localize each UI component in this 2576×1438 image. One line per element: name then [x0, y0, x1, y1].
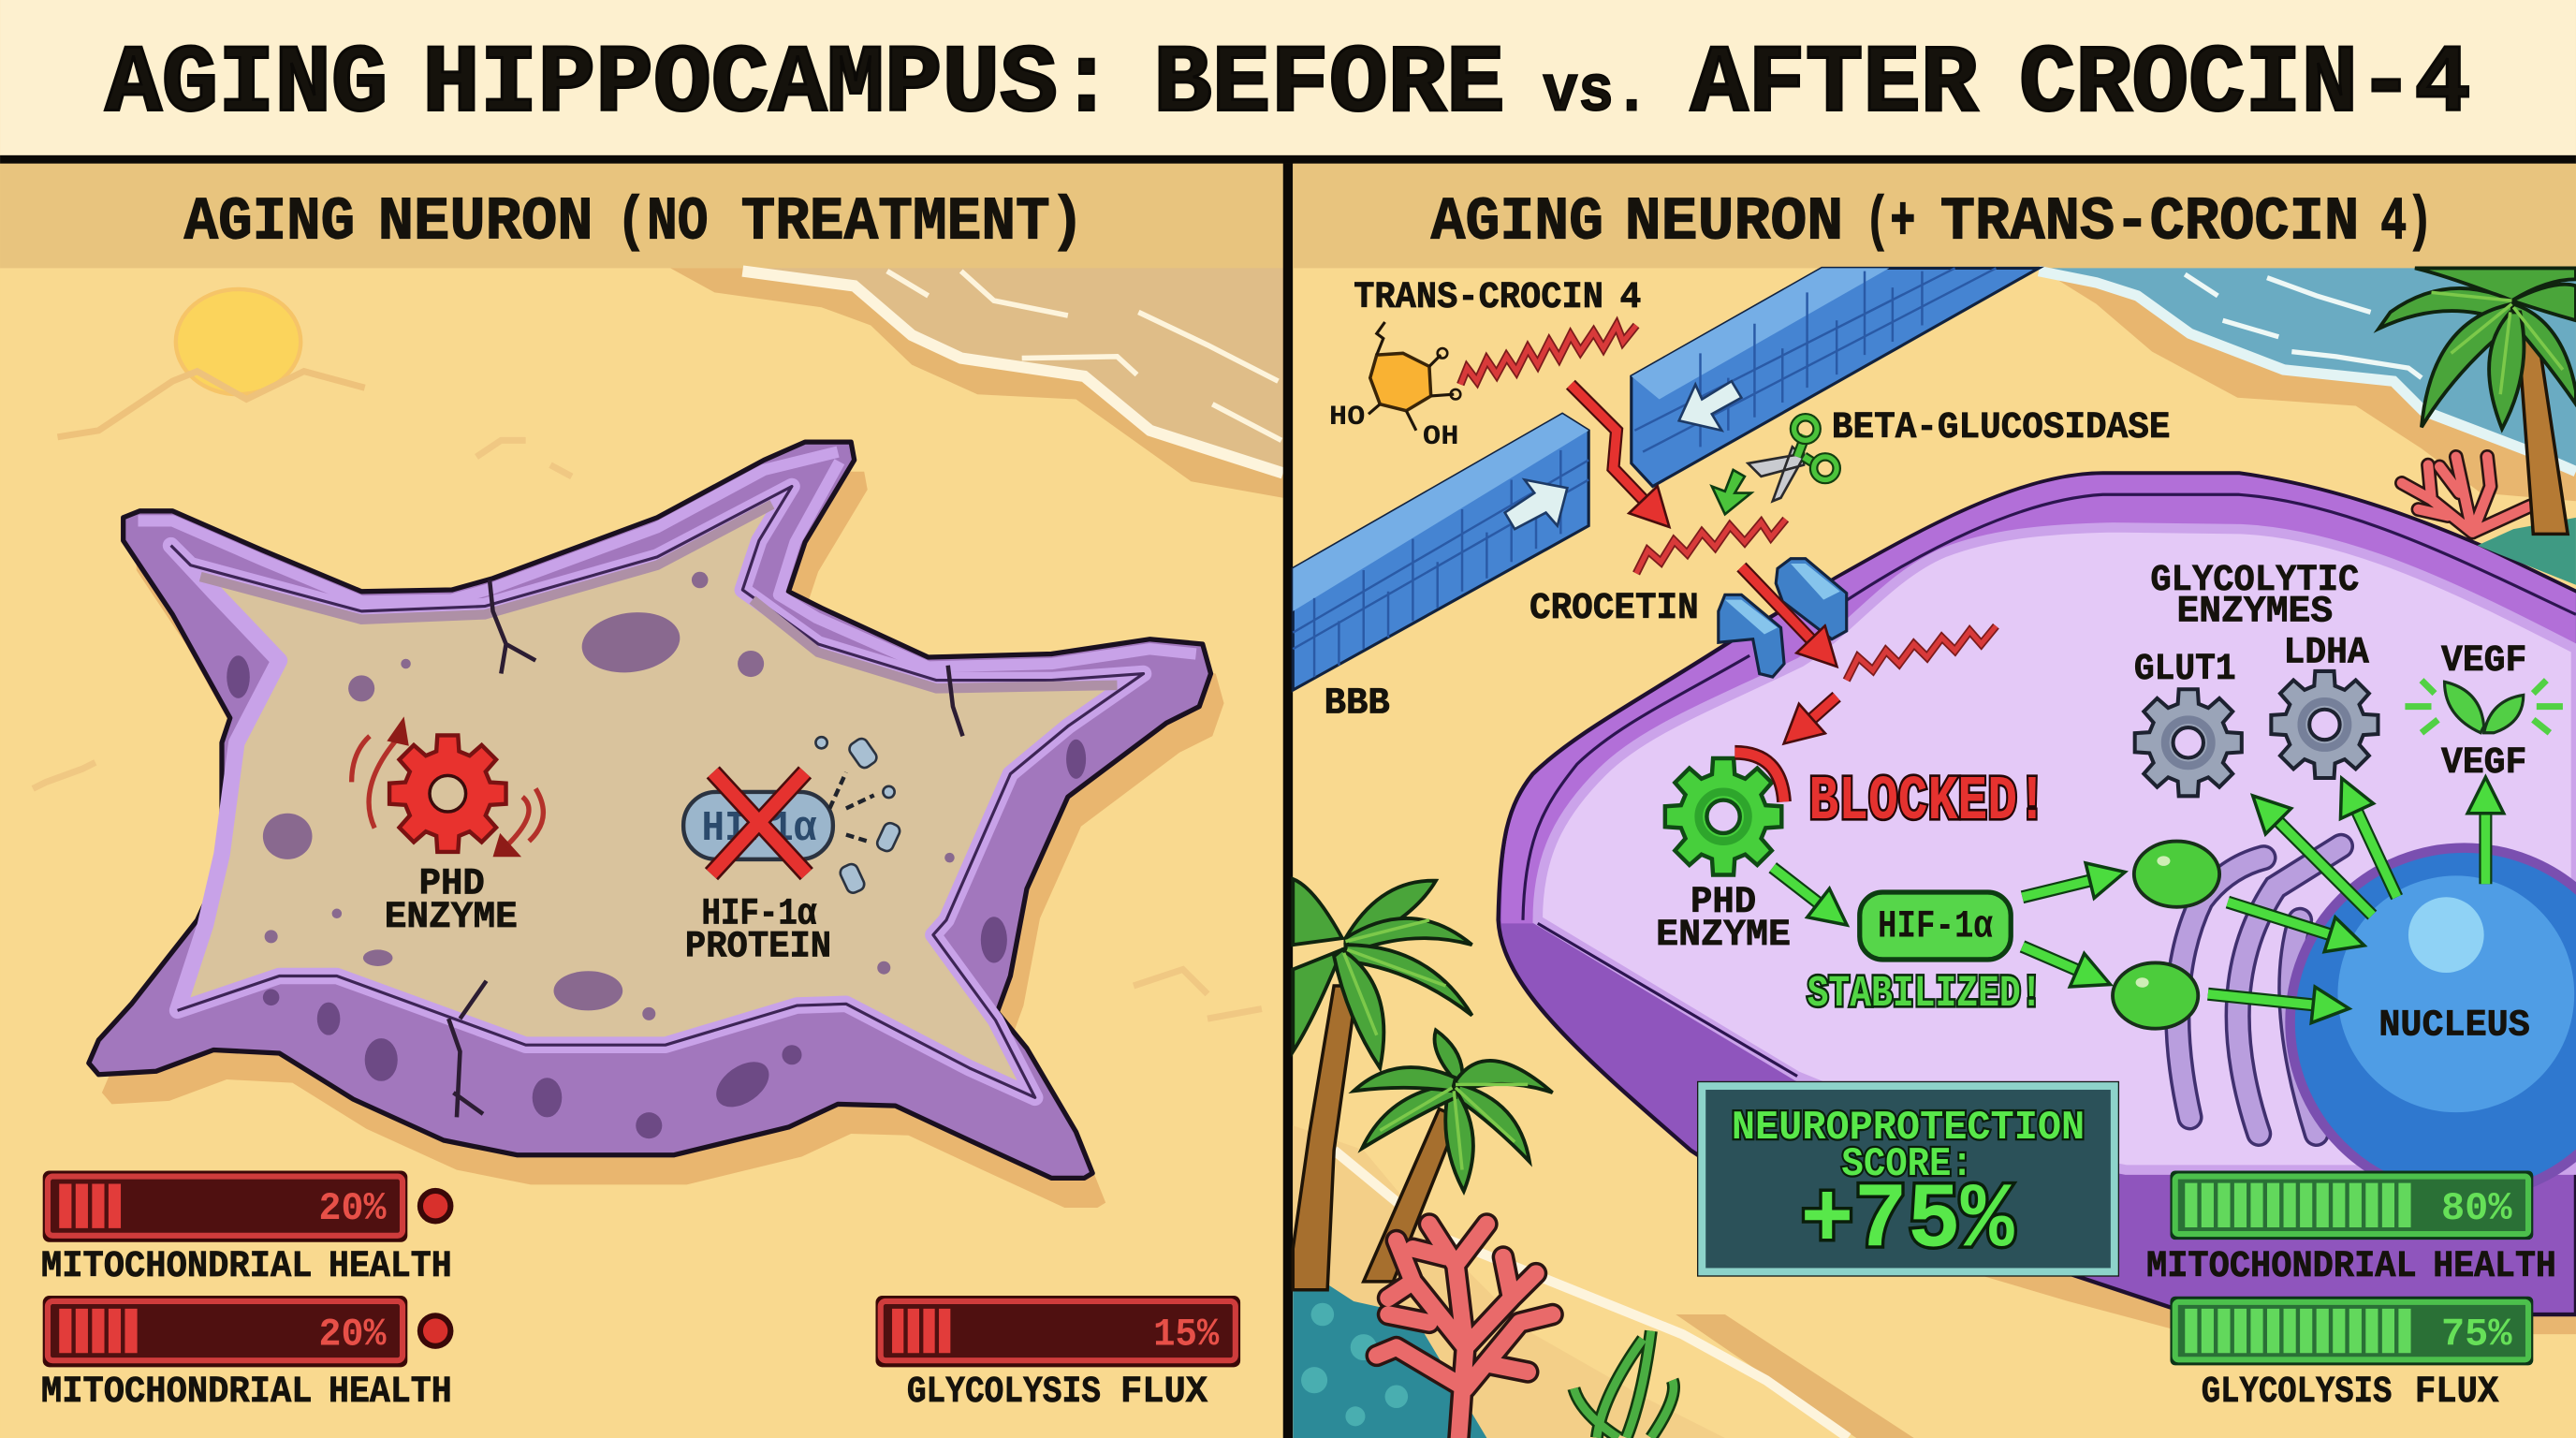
bar: mitochondrial health 20% bottom: 20%: [319, 1312, 387, 1357]
indicator light top: [417, 1188, 453, 1224]
organelles: [263, 572, 955, 1020]
bar: mitochondrial health 20% top: 20%: [319, 1186, 387, 1231]
icon: VEGF leaf: [2405, 681, 2563, 733]
title banner: [0, 0, 2576, 164]
panel heading left: NEURON: [378, 188, 593, 257]
neuroprotection score box: NEUROPROTECTION: [1732, 1105, 2085, 1152]
arrows: signalling from HIF-1 alpha to spheres: [2022, 879, 2096, 973]
label: PHD enzyme right: [1656, 881, 1791, 956]
damaged neuron cell: [89, 442, 1211, 1178]
panel heading left: TREATMENT): [741, 188, 1084, 257]
panel heading right: (+: [1865, 188, 1915, 257]
title text: AGING: [105, 31, 388, 139]
cell floor: [1538, 527, 2576, 1170]
arrows: nucleus to target genes: [2274, 805, 2485, 916]
sea and shoreline top right: [2039, 268, 2576, 501]
cytoplasm: [171, 486, 1144, 1097]
beach and water bottom left: [1293, 1125, 1914, 1438]
molecule: trans-crocin 4: [1329, 322, 1636, 452]
rocks top right: [2478, 518, 2576, 585]
label: VEGF top: VEGF: [2441, 639, 2526, 682]
neuroprotection score box: +75%: [1801, 1168, 2015, 1273]
label: VEGF bottom: VEGF: [2441, 741, 2526, 784]
panel: aging neuron no treatment: [0, 164, 1283, 1438]
mauve inner shadow: [200, 505, 1117, 688]
label: glycolytic enzymes: GLYCOLYTIC: [2150, 559, 2359, 601]
pill: HIF-1 alpha stabilized: HIF-1α: [1878, 903, 1993, 948]
membrane transporter channel: [1719, 559, 1847, 677]
icon: HIF-1 alpha crossed out: HIF1α: [701, 804, 817, 853]
title text: BEFORE: [1153, 31, 1505, 139]
label: mitochondrial health top: HEALTH: [329, 1245, 452, 1287]
neuron cell right: [1499, 473, 2576, 1334]
molecule: trans-crocin 4: HO: [1329, 401, 1365, 433]
icon: green PHD enzyme gear: [1665, 753, 1784, 874]
label: HIF-1 alpha protein: [685, 892, 831, 967]
arrows: spheres to nucleus: [2208, 902, 2336, 1005]
palm tree small bottom left: [1354, 1030, 1553, 1282]
neuroprotection score box: SCORE:: [1841, 1141, 1973, 1188]
nucleus: NUCLEUS: [2378, 1005, 2530, 1047]
label: glycolysis flux right: FLUX: [2415, 1371, 2499, 1413]
label: glycolysis flux left: FLUX: [1120, 1371, 1208, 1413]
bar: mitochondrial health 20% top: [43, 1170, 407, 1242]
molecule: crocetin inside cell: [1847, 626, 1996, 681]
panel heading right: [1293, 164, 2576, 268]
panel heading right: TRANS-CROCIN: [1940, 188, 2359, 257]
icon: GLUT1 gear: [2135, 689, 2242, 796]
panel heading right: NEURON: [1625, 188, 1843, 257]
panel heading right: AGING: [1431, 188, 1603, 257]
membrane dark spots: [227, 655, 1086, 1138]
arrow: crocetin to PHD: [1808, 697, 1837, 723]
label: blocked: BLOCKED!: [1808, 767, 2047, 838]
label: glycolysis flux right: GLYCOLYSIS: [2202, 1371, 2392, 1413]
bar: mitochondrial health 80%: 80%: [2441, 1186, 2512, 1231]
neuron shadow: [102, 472, 1224, 1208]
bar: glycolysis flux 15%: 15%: [1153, 1312, 1220, 1357]
title text: CROCIN-4: [2019, 31, 2471, 139]
palm tree large bottom left: [1293, 879, 1472, 1290]
label: glycolysis flux left: GLYCOLYSIS: [907, 1371, 1101, 1413]
arrow: crocetin enters cell: [1741, 566, 1815, 644]
label: PHD enzyme right: ENZYME: [1656, 914, 1791, 956]
label: trans-crocin 4: 4: [1620, 276, 1641, 318]
bar: glycolysis flux 75%: [2170, 1297, 2533, 1365]
label: HIF-1 alpha protein: PROTEIN: [685, 925, 831, 967]
label: PHD enzyme: PHD: [419, 863, 485, 905]
panel heading left: AGING: [184, 188, 355, 257]
membrane cracks: [448, 580, 963, 1117]
arrow: PHD to HIF-1 alpha: [1773, 868, 1823, 907]
seaweed bottom left: [1573, 1331, 1674, 1438]
arrow: crocin passes through BBB: [1571, 385, 1647, 505]
panel heading left: [0, 164, 1283, 268]
label: mitochondrial health bottom: HEALTH: [329, 1371, 452, 1413]
cell membrane outer wall: [89, 442, 1211, 1178]
label: PHD enzyme right: PHD: [1690, 881, 1756, 923]
molecule: trans-crocin 4: OH: [1423, 420, 1459, 452]
bar: glycolysis flux 75%: 75%: [2441, 1312, 2512, 1357]
beach shoreline left: [670, 268, 1283, 498]
label: trans-crocin 4: TRANS-CROCIN: [1354, 276, 1603, 318]
wall shadow on sand: [1808, 1224, 2576, 1334]
neuroprotection score box: [1697, 1081, 2119, 1277]
label: glycolytic enzymes: ENZYMES: [2176, 590, 2333, 632]
bar: mitochondrial health 20% bottom: [43, 1296, 407, 1367]
label: mitochondrial health right: MITOCHONDRIAL: [2146, 1245, 2417, 1287]
title text: [105, 31, 2471, 139]
panel: aging neuron plus trans-crocin 4: [1293, 164, 2576, 1438]
label: crocetin: CROCETIN: [1530, 587, 1699, 629]
label: glycolytic enzymes: [2150, 559, 2359, 632]
bar: mitochondrial health 80%: [2170, 1170, 2533, 1240]
icon: red PHD enzyme gear: [352, 723, 543, 855]
title text: HIPPOCAMPUS:: [422, 31, 1116, 139]
blood brain barrier wall lower: [1293, 414, 1588, 690]
pill: HIF-1 alpha stabilized: [1860, 892, 2011, 960]
cell rim: [1501, 475, 2576, 923]
title text: vs.: [1543, 57, 1649, 131]
label: HIF-1 alpha protein: HIF-1α: [701, 892, 817, 934]
coral top right: [2402, 457, 2530, 533]
label: mitochondrial health right: HEALTH: [2433, 1245, 2556, 1287]
bar: glycolysis flux 15%: [875, 1296, 1240, 1367]
label: PHD enzyme: [385, 863, 518, 938]
mitochondria and ER folds: [2177, 846, 2341, 1134]
icon: HIF-1 alpha crossed out: [683, 736, 901, 895]
label: beta-glucosidase: BETA-GLUCOSIDASE: [1832, 406, 2170, 448]
panel heading left: (NO: [616, 188, 708, 257]
icon: LDHA gear: [2271, 671, 2378, 778]
nucleus: [2291, 848, 2576, 1196]
green gene target sphere bottom: [2113, 962, 2198, 1029]
green gene target sphere top: [2134, 842, 2219, 907]
coral bottom left: [1377, 1224, 1553, 1438]
label: stabilized: STABILIZED!: [1808, 970, 2042, 1020]
icon: faded sun: [33, 289, 1262, 1019]
label: GLUT1: GLUT1: [2134, 648, 2236, 690]
panel heading right: 4): [2380, 188, 2433, 257]
label: mitochondrial health top: MITOCHONDRIAL: [41, 1245, 313, 1287]
indicator light bottom: [417, 1313, 453, 1349]
label: mitochondrial health bottom: MITOCHONDRIAL: [41, 1371, 313, 1413]
cell wall: [1499, 473, 2576, 1314]
blood brain barrier wall upper: [1632, 268, 2039, 486]
icon: scissors beta-glucosidase: [1712, 418, 1837, 514]
label: LDHA: LDHA: [2284, 631, 2369, 673]
label: PHD enzyme: ENZYME: [385, 896, 518, 938]
label: BBB: BBB: [1325, 682, 1390, 725]
title text: AFTER: [1690, 31, 1978, 139]
palm tree top right: [2378, 268, 2576, 534]
divider: [1283, 164, 1293, 1438]
light upper membrane band: [138, 452, 1196, 668]
molecule: crocetin: [1636, 520, 1786, 574]
